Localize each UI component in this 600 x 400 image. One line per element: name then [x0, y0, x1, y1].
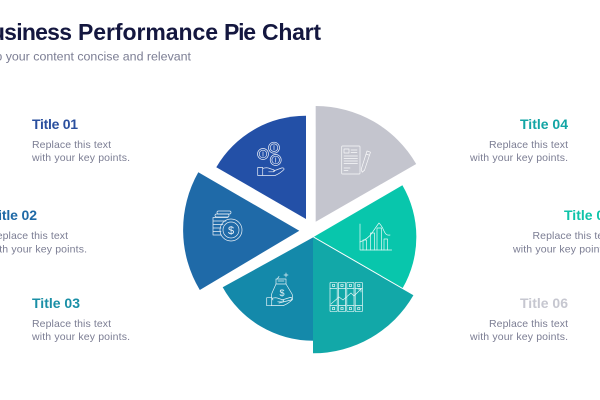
text block: title 01: Replace this text	[32, 139, 111, 151]
icon: books with trend arrow	[330, 282, 362, 312]
slice 02	[183, 172, 299, 290]
title: Chart	[262, 19, 321, 45]
text block: title 04: with your key points.	[469, 152, 568, 164]
text block: title 06: Title 06	[520, 295, 568, 311]
text block: title 05	[512, 207, 600, 256]
icon: document and pencil	[342, 146, 370, 174]
text block: title 03	[31, 295, 130, 343]
icon: coins in hand	[258, 142, 284, 176]
text block: title 01: Title 01	[32, 116, 78, 132]
text block: title 01	[31, 116, 130, 164]
text block: title 06	[469, 295, 568, 343]
text block: title 03: Replace this text	[32, 318, 111, 330]
text block: title 04: Title 04	[520, 116, 568, 132]
text block: title 06: Replace this text	[489, 318, 568, 330]
icon: money bag in hand	[267, 273, 293, 306]
icon: coin stack	[213, 211, 242, 241]
title: Performance	[78, 19, 218, 45]
text block: title 06: with your key points.	[469, 331, 568, 343]
title: Pie	[224, 19, 256, 45]
text block: title 04: Replace this text	[489, 139, 568, 151]
text block: title 01: with your key points.	[31, 152, 130, 164]
text block: title 03: with your key points.	[31, 331, 130, 343]
icon: coin stack: $	[228, 225, 234, 237]
text block: title 02	[0, 207, 87, 256]
slice 01	[216, 116, 306, 219]
text block: title 03: Title 03	[32, 295, 80, 311]
slice 06	[313, 237, 413, 353]
slice 03	[223, 237, 313, 341]
slice 04	[316, 106, 416, 222]
pie chart	[183, 106, 416, 353]
icon: bar chart with trend	[360, 223, 392, 250]
slice 05	[314, 185, 416, 288]
icon: money bag in hand: $	[279, 288, 285, 298]
text block: title 04	[469, 116, 568, 164]
